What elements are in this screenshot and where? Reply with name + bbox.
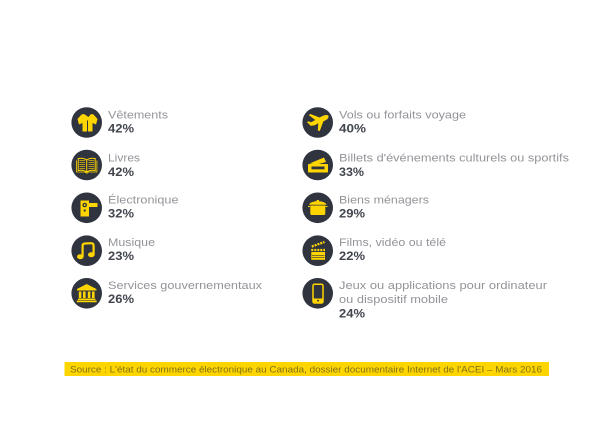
item: Services gouvernementaux <box>71 278 263 309</box>
label: Vols ou forfaits voyage: Vols ou forfaits voyage <box>339 109 466 121</box>
item: Vols ou forfaits voyage <box>302 107 466 138</box>
label: Jeux ou applications pour ordinateur ou dispositif mobile <box>339 280 547 306</box>
value: 29%: 29% <box>339 208 365 220</box>
value: 32%: 32% <box>108 208 134 220</box>
source text: Source : L'état du commerce électronique au Canada, dossier documentaire Internet de l'ACEI – Mars 2016 <box>70 364 542 374</box>
item: Musique <box>71 235 155 266</box>
label: Vêtements: Vêtements <box>108 109 169 121</box>
label: Jeux ou applications pour ordinateur ou dispositif mobile: Jeux ou applications pour ordinateur <box>339 280 547 292</box>
label: Billets d'événements culturels ou sportifs: Billets d'événements culturels ou sportifs <box>339 153 570 165</box>
label: Livres: Livres <box>108 153 141 165</box>
value: 22%: 22% <box>339 251 365 263</box>
label: Jeux ou applications pour ordinateur ou dispositif mobile: ou dispositif mobile <box>339 294 448 306</box>
value: 42%: 42% <box>108 124 134 136</box>
value: 24%: 24% <box>339 308 365 320</box>
icon: government building <box>77 284 97 302</box>
item: Électronique <box>71 192 178 223</box>
icon: smartphone <box>313 284 323 303</box>
icon: shirt <box>78 114 98 132</box>
icon: cooking pot <box>308 200 328 215</box>
item: Vêtements <box>71 107 169 138</box>
icon: tickets <box>308 158 328 172</box>
label: Musique: Musique <box>108 237 155 249</box>
value: 26%: 26% <box>108 294 134 306</box>
item: Livres <box>71 150 141 180</box>
icon: clapperboard <box>311 242 325 260</box>
value: 33%: 33% <box>339 167 364 179</box>
label: Électronique: Électronique <box>108 194 178 206</box>
source bar <box>64 362 549 376</box>
icon: music notes <box>77 243 95 259</box>
label: Biens ménagers: Biens ménagers <box>339 194 430 206</box>
item: Billets d'événements <box>302 150 570 180</box>
label: Films, vidéo ou télé: Films, vidéo ou télé <box>339 237 446 249</box>
item: Films, vidéo ou télé <box>302 235 446 266</box>
value: 42%: 42% <box>108 167 134 179</box>
value: 23%: 23% <box>108 251 134 263</box>
icon: camcorder <box>80 200 98 216</box>
item: Jeux ou applications <box>302 278 547 320</box>
icon: open book <box>76 158 97 173</box>
value: 40%: 40% <box>339 124 366 136</box>
label: Services gouvernementaux: Services gouvernementaux <box>108 280 263 292</box>
icon: airplane <box>307 114 329 131</box>
item: Biens ménagers <box>302 192 430 223</box>
